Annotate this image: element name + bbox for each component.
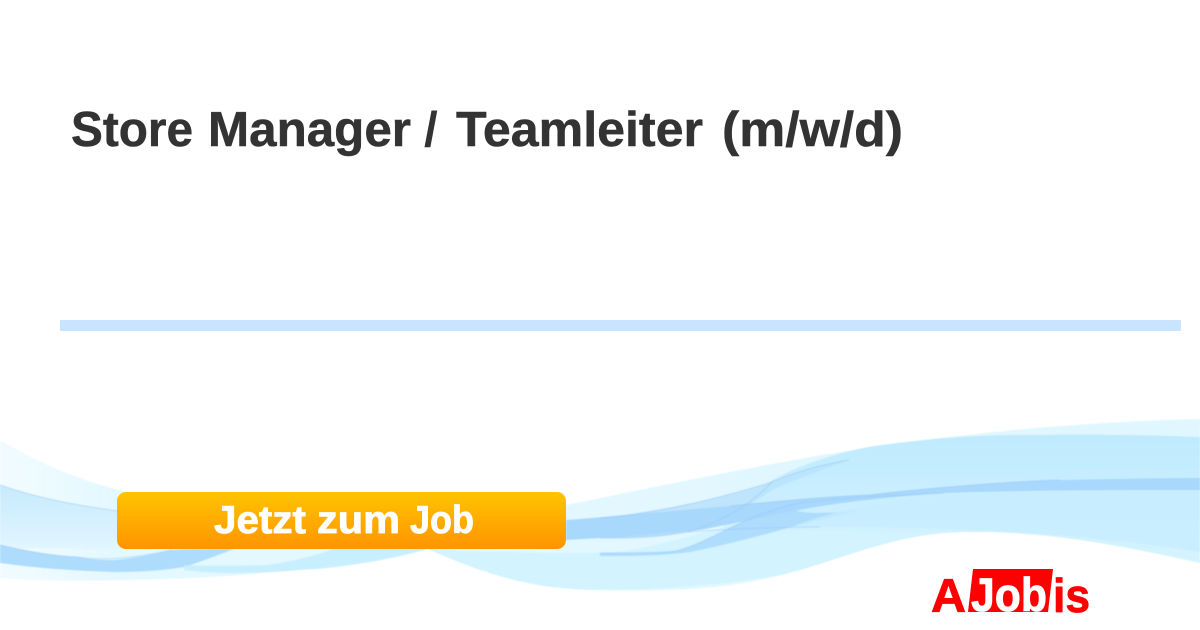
wave: left upper band — [0, 485, 300, 550]
title: / — [424, 102, 438, 157]
call to action button: zum — [317, 499, 400, 542]
divider bar — [60, 320, 1181, 331]
wave: outer pale band — [0, 419, 1200, 590]
wave: pale ribbon right — [791, 491, 1200, 552]
wave: strand rising to the upper band — [600, 460, 849, 539]
wave: dark ribbon lower — [600, 503, 860, 556]
wave: edge lines — [0, 460, 1059, 559]
logo: AJobis: Job — [971, 568, 1047, 621]
call to action button: Jetzt — [214, 499, 306, 542]
logo: AJobis: is — [1053, 569, 1090, 622]
wave: lower middle band — [428, 520, 980, 590]
title — [71, 102, 903, 157]
wave: left dark ribbon — [0, 545, 234, 572]
title: Store — [71, 102, 193, 157]
wave: left lower ribbon — [184, 549, 428, 573]
wave: upper right band — [720, 435, 1200, 563]
call to action button — [117, 492, 566, 549]
title: Manager — [208, 102, 411, 157]
wave background — [0, 419, 1200, 590]
title: (m/w/d) — [722, 102, 903, 157]
wave: dark ribbon upper — [566, 478, 1200, 540]
title: Teamleiter — [456, 102, 703, 157]
logo: AJobis: A — [931, 569, 966, 622]
call to action button: Job — [410, 499, 474, 542]
logo: AJobis — [931, 568, 1090, 622]
